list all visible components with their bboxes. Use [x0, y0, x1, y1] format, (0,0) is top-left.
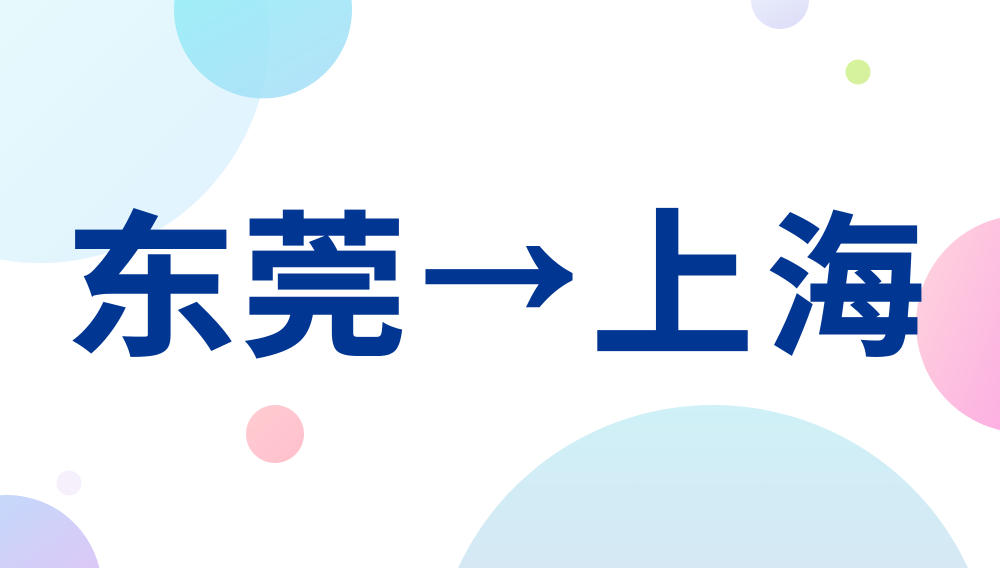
circle: small pink [246, 405, 304, 463]
circle: small green [846, 60, 870, 84]
title: 莞 [241, 163, 407, 389]
circle: periwinkle bottom left [0, 495, 99, 568]
circle: tiny lavender [56, 470, 82, 496]
circle: lavender top [751, 0, 809, 29]
title: 海 [765, 161, 925, 389]
title: 东 [64, 162, 238, 389]
title [64, 100, 925, 391]
circle: large aqua bottom [458, 405, 968, 568]
circle: pink right [916, 218, 1000, 430]
circle: large pale blue top left [0, 0, 269, 263]
circle: blue top [174, 0, 352, 98]
title: → [379, 100, 619, 368]
title: 上 [591, 157, 754, 391]
